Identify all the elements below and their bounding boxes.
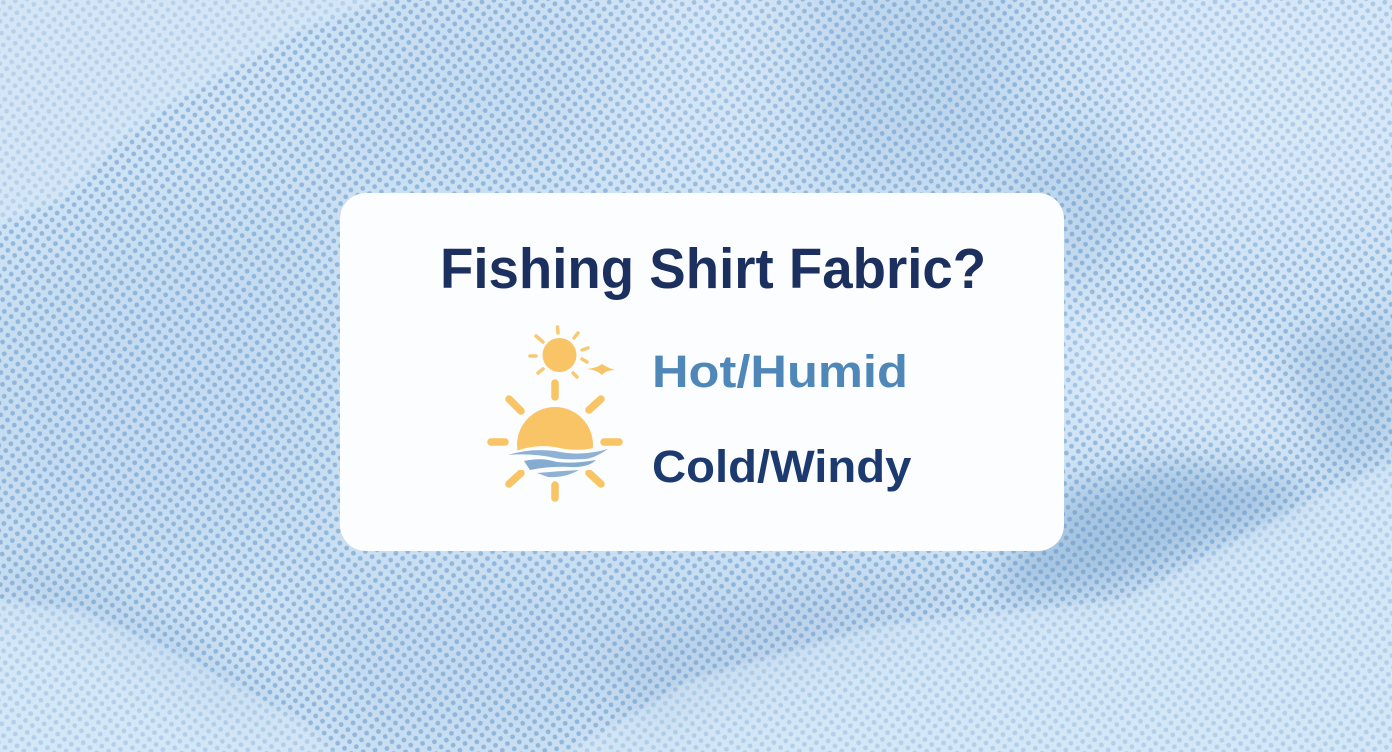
title: Fishing Shirt Fabric?	[440, 237, 986, 301]
panel: white question card	[340, 193, 1064, 551]
label: cold/windy: Cold/Windy	[652, 441, 911, 492]
icon: small sun with rays	[530, 327, 615, 377]
icon: suns over water	[487, 325, 623, 502]
fold: bottom-left light panel	[0, 600, 345, 752]
fold: bottom-right light panel	[550, 458, 1392, 752]
icon: large sun with rays and waves	[491, 383, 619, 498]
fold: top-left light panel	[0, 0, 420, 228]
label: hot/humid: Hot/Humid	[652, 346, 908, 397]
